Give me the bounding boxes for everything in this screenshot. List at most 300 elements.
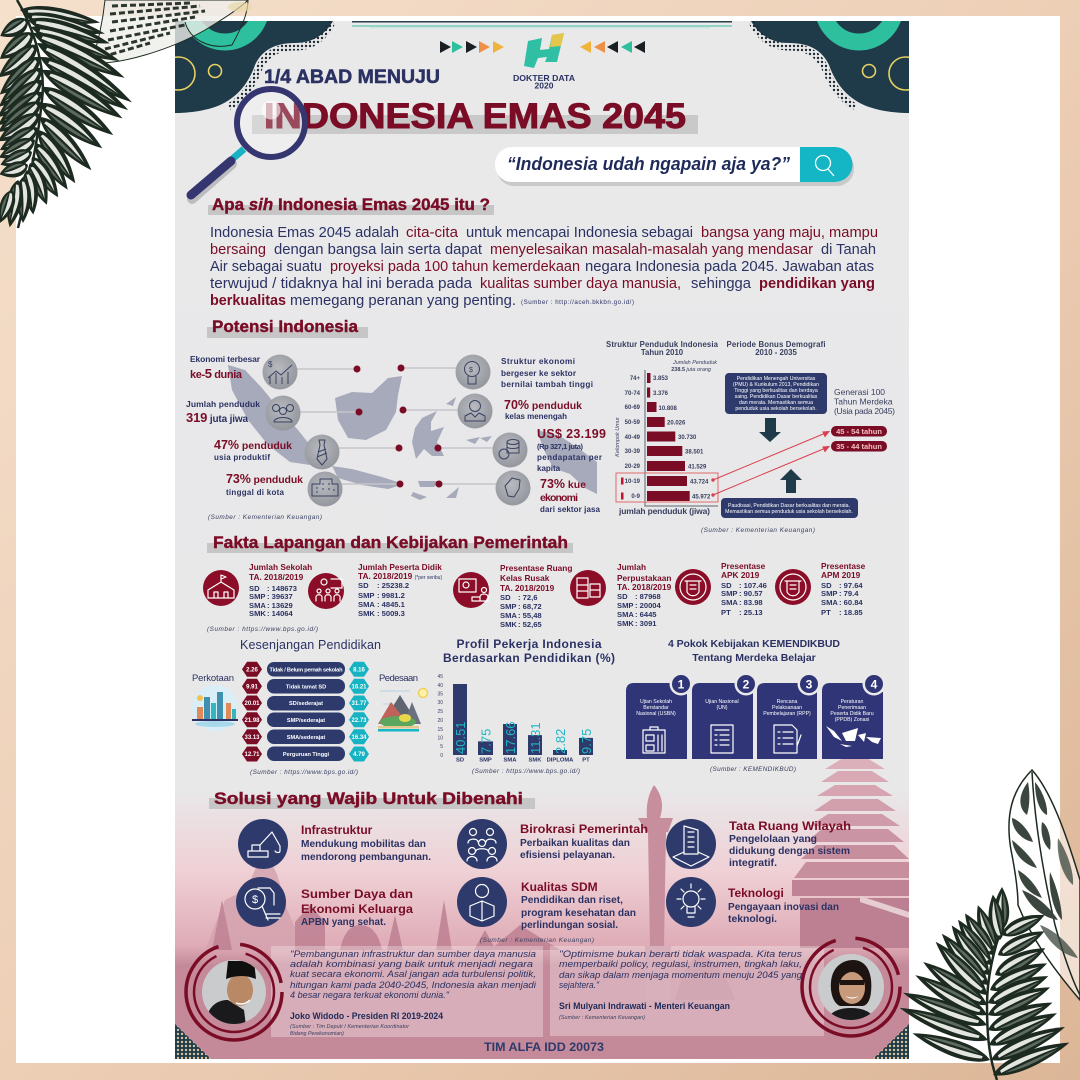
rows: left values, category pills, right values: Tidak / Belum pernah sekolah xyxy=(270,668,343,674)
logo: Dokter Data 2020 xyxy=(513,33,575,90)
callout: basic education box: Paudisasi, Pendidikan Dasar berkualitas dan merata. xyxy=(728,503,850,509)
labels: Perkotaan xyxy=(192,673,234,684)
fact: students: SMK xyxy=(358,609,375,618)
solution: sumber daya: APBN yang sehat. xyxy=(301,917,386,928)
icon: coins xyxy=(492,432,528,468)
fact: APK: APK 2019 xyxy=(721,570,760,580)
age labels and values: 10.808 xyxy=(658,406,678,412)
solution: kualitas SDM: Kualitas SDM xyxy=(521,880,598,894)
age labels and values: 3.853 xyxy=(653,376,669,382)
solution: birokrasi: Birokrasi Pemerintah xyxy=(520,822,648,836)
policy card 1: Berstandar xyxy=(643,705,669,711)
icon: city xyxy=(192,685,238,731)
rows: left values, category pills, right values xyxy=(242,662,369,762)
rows: left values, category pills, right values: 12.71 xyxy=(244,752,260,758)
x labels: SMK xyxy=(529,758,542,764)
solution: tata ruang: didukung dengan sistem xyxy=(729,846,850,857)
callout: upper education box xyxy=(725,373,827,414)
landmark: temple silhouettes xyxy=(206,867,714,964)
fact: libraries: Jumlah xyxy=(617,562,646,572)
callout: basic education box xyxy=(721,498,858,518)
fact: damaged classrooms: : 68,72 xyxy=(518,602,542,611)
bars xyxy=(647,373,690,501)
rows: left values, category pills, right values: 9.91 xyxy=(246,684,258,690)
rows: left values, category pills, right values: SMA/sederajat xyxy=(287,735,325,741)
rotated value labels: 2.82 xyxy=(553,729,568,754)
chart axes xyxy=(645,370,718,506)
icon: money bulb: $ xyxy=(469,367,473,374)
y axis: 10 xyxy=(437,736,443,742)
fact: damaged classrooms: SMK xyxy=(500,620,517,629)
callout: upper education box: penduduk usia sekolah bersekolah. xyxy=(735,406,817,412)
fact: schools: SMK xyxy=(249,609,266,618)
map of Indonesia xyxy=(228,365,597,500)
fact: APK: : 107.46 xyxy=(739,581,767,590)
fact: APM: APM 2019 xyxy=(821,570,861,580)
fact: libraries: : 20004 xyxy=(635,601,662,610)
quote text: "Pembangunan infrastruktur dan sumber daya manusia xyxy=(290,949,536,959)
title highlight bar xyxy=(252,115,698,134)
rows: left values, category pills, right values: Perguruan Tinggi xyxy=(283,752,330,758)
solution: birokrasi xyxy=(457,819,648,869)
poster sheet xyxy=(162,0,922,1059)
source note: (Sumber : https://www.bps.go.id/) xyxy=(250,769,358,776)
fact: damaged classrooms: TA. 2018/2019 xyxy=(500,583,555,593)
quote text: sejahtera." xyxy=(559,980,600,990)
age labels and values: 41.529 xyxy=(688,464,707,470)
fact: APK: SMA xyxy=(721,598,738,607)
source note: (Sumber : Kementerian Keuangan) xyxy=(559,1015,645,1021)
age labels and values: 38.501 xyxy=(685,450,704,456)
callout: upper education box: Tinggi yang berkualitas dan berdaya xyxy=(734,388,818,394)
source note: (Sumber : Tim Deputi I Kementerian Koordinator xyxy=(290,1024,409,1030)
map labels right: 73% kue xyxy=(540,477,586,491)
fact: libraries: : 6445 xyxy=(635,610,657,619)
source note: (Sumber : https://www.bps.go.id/) xyxy=(207,626,318,633)
fact: APM: : 79.4 xyxy=(839,589,859,598)
rows: left values, category pills, right values: 4.79 xyxy=(353,752,365,758)
age labels and values: 60-69 xyxy=(625,405,641,411)
panel: population structure chart: jumlah penduduk (jiwa) xyxy=(618,506,710,516)
map labels left xyxy=(186,354,303,497)
policy card 4 xyxy=(822,672,886,759)
panel: four policies xyxy=(626,638,886,773)
age labels and values: 43.724 xyxy=(690,480,709,486)
x labels: PT xyxy=(582,758,590,764)
policy card 2 xyxy=(692,672,758,759)
age labels and values: 20.026 xyxy=(667,420,686,426)
fact: students: SMP xyxy=(358,591,374,600)
solution: kualitas SDM: program kesehatan dan xyxy=(521,908,636,919)
fact: libraries: SMK xyxy=(617,619,634,628)
icon: people group xyxy=(266,396,300,430)
map labels right: pendapatan per xyxy=(537,453,602,462)
policy card 1: 1 xyxy=(678,678,685,692)
rows: left values, category pills, right values: SMP/sederajat xyxy=(287,718,325,724)
quote text: memperbaiki policy, regulasi, instrumen, tingkah laku, xyxy=(559,959,802,969)
fact: damaged classrooms: : 52,65 xyxy=(518,620,542,629)
y axis: 45 xyxy=(437,674,443,680)
age labels and values xyxy=(625,376,711,500)
speaker name: Sri Mulyani Indrawati - Menteri Keuangan xyxy=(559,1001,730,1012)
age labels and values: 0-9 xyxy=(631,494,641,500)
fact: libraries: Perpustakaan xyxy=(617,573,671,583)
map labels right: bernilai tambah tinggi xyxy=(501,380,593,389)
rows: left values, category pills, right values: 33.13 xyxy=(244,735,260,741)
logo: Dokter Data 2020: DOKTER DATA xyxy=(513,73,575,83)
quote text: 4 besar negara terkuat ekonomi dunia." xyxy=(290,990,450,1000)
age labels and values: 74+ xyxy=(630,376,640,382)
text block: definition paragraph: terwujud / tidaknya hal ini berada pada xyxy=(210,276,472,292)
text block: definition paragraph: proyeksi pada 100 tahun kemerdekaan xyxy=(330,259,580,275)
fact: schools xyxy=(203,562,312,618)
fact: libraries xyxy=(570,562,672,628)
text block: definition paragraph: menyelesaikan masalah-masalah yang mendasar xyxy=(490,242,813,258)
map labels left: 73% penduduk xyxy=(226,472,303,486)
age labels and values: 10-19 xyxy=(625,479,641,485)
heading bar xyxy=(207,327,368,338)
rows: left values, category pills, right values: 21.98 xyxy=(244,718,260,724)
panel: quote Joko Widodo xyxy=(271,946,543,1037)
fact: damaged classrooms xyxy=(453,563,572,629)
policy card 2: (UN) xyxy=(717,705,728,711)
quote text xyxy=(290,949,537,1000)
map labels right: bergeser ke sektor xyxy=(501,369,577,378)
fact: APK: SD xyxy=(721,581,732,590)
solution: sumber daya: Sumber Daya dan xyxy=(301,887,413,901)
icon: money bulb xyxy=(456,354,490,390)
fact: damaged classrooms: SD xyxy=(500,593,511,602)
portrait: Sri Mulyani xyxy=(802,938,900,1036)
fact: APM: SD xyxy=(821,581,832,590)
map labels right: 70% penduduk xyxy=(504,398,582,412)
fact: APM: SMA xyxy=(821,598,838,607)
age labels and values: 50-59 xyxy=(625,420,641,426)
heading: 4 Pokok Kebijakan KEMENDIKBUD xyxy=(668,638,840,650)
title: 1/4 abad menuju: 1/4 ABAD MENUJU xyxy=(264,67,440,88)
x labels: SD xyxy=(456,758,464,764)
text block: definition paragraph: kualitas sumber daya manusia, xyxy=(480,276,681,292)
policy card 2: 2 xyxy=(743,678,750,692)
policy card 1: Ujian Sekolah xyxy=(640,699,672,705)
fact: damaged classrooms: : 72,6 xyxy=(518,593,537,602)
quote text: adalah kombinasi yang baik untuk menjadi negara xyxy=(290,959,533,969)
rows: left values, category pills, right values: 8.16 xyxy=(353,668,365,674)
callout: upper education box: Pendidikan Menengah Universitas xyxy=(737,376,816,382)
bottom corner halftone triangles xyxy=(175,1024,909,1059)
corner: top-right wave with teal ring and yellow circles xyxy=(750,21,909,113)
highlight box xyxy=(616,473,718,502)
heading: Fakta Lapangan: Fakta Lapangan dan Kebijakan Pemerintah xyxy=(213,533,568,552)
fact: libraries: : 3091 xyxy=(635,619,657,628)
solution: teknologi: Pengayaan inovasi dan xyxy=(728,902,839,913)
text block: definition paragraph: negara Indonesia pada 2045. Jawaban atas xyxy=(585,259,874,275)
fact: schools: SD xyxy=(249,584,260,593)
arrow: down xyxy=(759,418,781,442)
fact: APK: SMP xyxy=(721,589,737,598)
fact: students: : 5009.3 xyxy=(377,609,405,618)
arrows to generation pills xyxy=(712,432,829,496)
text block: definition paragraph xyxy=(210,225,878,309)
map labels left: Ekonomi terbesar xyxy=(190,354,261,364)
quote text xyxy=(559,949,803,990)
fact: students: SD xyxy=(358,581,369,590)
text block: definition paragraph: di Tanah xyxy=(821,242,876,258)
rows: left values, category pills, right values: 22.73 xyxy=(351,718,367,724)
logo: Dokter Data 2020: 2020 xyxy=(535,80,554,90)
solution: infrastruktur: Infrastruktur xyxy=(301,823,373,837)
policy card 4: Peraturan xyxy=(841,699,863,705)
age labels and values: 70-74 xyxy=(625,391,641,397)
quote text: dan sikap dalam menjaga momentum menuju 2045 yang xyxy=(559,970,802,980)
map labels left: 47% penduduk xyxy=(214,438,292,452)
fact: APM xyxy=(775,561,866,617)
arrows: left chevrons xyxy=(440,41,504,53)
fact: schools: : 148673 xyxy=(267,584,297,593)
fact: students: Jumlah Peserta Didik xyxy=(358,562,442,572)
solution: sumber daya: Ekonomi Keluarga xyxy=(301,902,413,916)
search bar xyxy=(495,147,854,186)
heading: Potensi Indonesia: Potensi Indonesia xyxy=(212,317,359,336)
policy card 4: Penerimaan xyxy=(838,705,866,711)
fact: damaged classrooms: SMA xyxy=(500,611,517,620)
generation label: Tahun Merdeka xyxy=(834,396,893,406)
solution: teknologi: Teknologi xyxy=(728,886,784,900)
callout: upper education box: dan merata. Memastikan semua xyxy=(739,400,813,406)
icon: magnifying glass xyxy=(191,89,305,199)
fact: APK: : 83.98 xyxy=(739,598,763,607)
policy card 4: (PPDB) Zonasi xyxy=(835,717,869,723)
fact: schools: : 39637 xyxy=(267,592,293,601)
rows: left values, category pills, right values: 16.34 xyxy=(351,735,367,741)
y axis: 35 xyxy=(437,692,443,698)
bars xyxy=(453,684,593,755)
y axis: 0 xyxy=(440,753,443,759)
landmark: Bali pagoda silhouette xyxy=(792,758,909,948)
y axis: 5 xyxy=(440,744,443,750)
text block: definition paragraph: Indonesia Emas 2045 adalah xyxy=(210,225,399,241)
solution: sumber daya xyxy=(236,877,413,928)
map labels right: US$ 23.199 xyxy=(537,427,606,441)
solution: tata ruang: Pengelolaan yang xyxy=(729,834,817,845)
rows: left values, category pills, right values: Tidak tamat SD xyxy=(286,684,326,690)
text block: definition paragraph: berkualitas xyxy=(210,293,286,309)
icon: economy chart: $ xyxy=(268,360,273,369)
fact: libraries: : 87968 xyxy=(635,592,661,601)
solution: tata ruang: Tata Ruang Wilayah xyxy=(729,819,851,833)
heading: Kesenjangan Pendidikan xyxy=(240,638,381,652)
policy card 1: Nasional (USBN) xyxy=(636,711,676,717)
policy card 3: Rencana xyxy=(777,699,797,705)
footer team credit: TIM ALFA IDD 20073 xyxy=(484,1042,604,1054)
map labels left: 319 juta jiwa xyxy=(186,410,248,425)
text block: definition paragraph: bangsa yang maju, mampu xyxy=(701,225,878,241)
decoration: bottom-right palm frond xyxy=(897,887,1072,1080)
icon: economy chart xyxy=(262,354,298,390)
age labels and values: 40-49 xyxy=(625,435,641,441)
fact: APM: Presentase xyxy=(821,561,866,571)
policy card 1 xyxy=(626,672,692,759)
generation label: (Usia pada 2045) xyxy=(834,406,895,416)
fact: APM: PT xyxy=(821,608,831,617)
source note: (Sumber : KEMENDIKBUD) xyxy=(710,766,796,773)
rows: left values, category pills, right values: 20.01 xyxy=(244,701,260,707)
generation label xyxy=(834,387,895,416)
source note: (Sumber : Kementerian Keuangan) xyxy=(480,937,594,944)
heading bar xyxy=(209,798,535,809)
callout: basic education box: Memastikan semua penduduk usia sekolah bersekolah. xyxy=(725,509,853,515)
solution: sumber daya: $ xyxy=(252,894,258,906)
heading xyxy=(668,638,840,664)
population total note xyxy=(671,360,717,373)
age labels and values: 30-39 xyxy=(625,449,641,455)
panel: worker profile bar chart xyxy=(437,637,615,775)
text block: definition paragraph: Air sebagai suatu xyxy=(210,259,322,275)
solution: kualitas SDM xyxy=(457,877,636,931)
search text: “Indonesia udah ngapain aja ya?” xyxy=(507,154,790,174)
solution: tata ruang: integratif. xyxy=(729,858,777,869)
quote text: hitungan kami pada 2040-2045, Indonesia akan menjadi xyxy=(290,980,537,990)
quote text: "Optimisme bukan berarti tidak waspada. Kita terus xyxy=(559,949,803,959)
solution: kualitas SDM: perlindungan sosial. xyxy=(521,920,618,931)
age labels and values: 3.376 xyxy=(653,391,669,397)
portrait: Joko Widodo xyxy=(186,944,282,1040)
fact: APM: : 60.84 xyxy=(839,598,863,607)
panel: solutions xyxy=(236,819,851,944)
title: Indonesia Emas 2045: INDONESIA EMAS 2045 xyxy=(264,97,686,136)
fact: damaged classrooms: Kelas Rusak xyxy=(500,573,550,583)
pill: 35-44: 35 - 44 tahun xyxy=(836,442,882,451)
fact: libraries: TA. 2018/2019 xyxy=(617,582,672,592)
fact: damaged classrooms: : 55,48 xyxy=(518,611,542,620)
decoration: top engraved leaf xyxy=(92,0,252,63)
callout: upper education box: (PMU) & Kurikulum 2013, Pendidikan xyxy=(733,382,819,388)
source note: (Sumber : Kementerian Keuangan) xyxy=(701,527,815,534)
icon: middle class person xyxy=(458,394,492,428)
fact: students: : 25238.2 xyxy=(377,581,409,590)
policy card 3: 3 xyxy=(806,678,813,692)
landmark: Monas monument silhouette xyxy=(638,785,673,956)
policy card 4: Peserta Didik Baru xyxy=(830,711,874,717)
chart titles: 2010 - 2035 xyxy=(755,348,797,357)
heading: what is Indonesia Emas: Apa sih Indonesia Emas 2045 itu ? xyxy=(212,195,490,214)
fact: schools: SMP xyxy=(249,592,265,601)
fact: students: SMA xyxy=(358,600,375,609)
fact: schools: TA. 2018/2019 xyxy=(249,572,304,582)
panel: education gap: Pedesaan xyxy=(379,673,418,684)
rotated value labels xyxy=(453,721,594,754)
map labels left: Jumlah penduduk xyxy=(186,399,260,409)
map labels left: usia produktif xyxy=(214,453,270,462)
x labels: SMA xyxy=(504,758,517,764)
top centre strip xyxy=(352,21,732,28)
fact: students: : 9981.2 xyxy=(377,591,405,600)
solution: teknologi xyxy=(666,877,839,927)
map labels right: ekonomi xyxy=(540,492,578,504)
fact: schools: : 14064 xyxy=(267,609,294,618)
decoration: top-left palm frond xyxy=(0,0,137,229)
solution: teknologi: teknologi. xyxy=(728,914,777,925)
panel: Indonesia potential map xyxy=(186,354,606,521)
panel: quote Sri Mulyani xyxy=(550,946,824,1036)
y axis xyxy=(437,674,443,759)
policy card 3: Pembelajaran (RPP) xyxy=(763,711,811,717)
solution: infrastruktur: mendorong pembangunan. xyxy=(301,852,431,863)
quote text: kuat secara ekonomi. Asal jangan ada turbulensi politik, xyxy=(290,969,536,979)
callout: upper education box: saing. Pendidikan Dasar berkualitas xyxy=(735,394,818,400)
map labels left: tinggal di kota xyxy=(226,488,285,497)
chart titles: Tahun 2010 xyxy=(641,348,684,357)
age labels and values: 20-29 xyxy=(625,464,641,470)
source note: (Sumber : https://www.bps.go.id/) xyxy=(472,768,580,775)
decoration: bottom-right large leaf xyxy=(1009,770,1080,1000)
x labels xyxy=(456,758,590,764)
chart titles: Periode Bonus Demografi xyxy=(726,340,826,349)
policy card 3: Pelaksanaan xyxy=(772,705,802,711)
y axis: 20 xyxy=(437,718,443,724)
fact: APM: SMP xyxy=(821,589,837,598)
chart title: Profil Pekerja Indonesia xyxy=(456,637,602,651)
map labels right: Struktur ekonomi xyxy=(501,357,575,366)
solution: birokrasi: Perbaikan kualitas dan xyxy=(520,838,630,849)
fact: students xyxy=(308,562,442,618)
arrows: right chevrons xyxy=(580,41,645,53)
fact: libraries: SMA xyxy=(617,610,634,619)
fact: students: TA. 2018/2019 (*per seribu) xyxy=(358,571,442,581)
map labels right: (Rp 327,1 juta) xyxy=(537,442,584,451)
chart title: Berdasarkan Pendidikan (%) xyxy=(443,651,615,665)
fact: schools: SMA xyxy=(249,601,266,610)
population total note: 238.5 juta orang xyxy=(671,367,712,373)
x labels: SMP xyxy=(479,758,492,764)
source note: (Sumber : Kementerian Keuangan) xyxy=(208,514,322,521)
fact: damaged classrooms: Presentase Ruang xyxy=(500,563,572,573)
text block: definition paragraph: untuk mencapai Indonesia sebagai xyxy=(466,225,693,241)
text block: definition paragraph: (Sumber : http://aceh.bkkbn.go.id/) xyxy=(521,299,634,306)
policy card 4: 4 xyxy=(871,678,878,692)
fact: students: : 4845.1 xyxy=(377,600,406,609)
icon: hands xyxy=(496,470,530,506)
solution: infrastruktur xyxy=(238,819,431,869)
y axis: 15 xyxy=(437,727,443,733)
fact: APK: : 90.57 xyxy=(739,589,763,598)
icon: necktie xyxy=(304,434,340,470)
policy card 3 xyxy=(757,672,820,759)
rows: left values, category pills, right values: 16.21 xyxy=(351,684,367,690)
age labels and values: 30.730 xyxy=(678,435,697,441)
heading: Solusi: Solusi yang Wajib Untuk Dibenahi xyxy=(214,789,523,808)
rows: left values, category pills, right values: SD/sederajat xyxy=(289,701,323,707)
text block: definition paragraph: cita-cita xyxy=(406,225,458,241)
rotated value labels: 11.31 xyxy=(528,722,543,754)
panel: population structure chart xyxy=(606,340,895,534)
policy card 2: Ujian Nasional xyxy=(705,699,739,705)
fact: schools: Jumlah Sekolah xyxy=(249,562,312,572)
rotated value labels: 7.75 xyxy=(478,729,494,754)
text block: definition paragraph: pendidikan yang xyxy=(759,276,875,292)
icon: city building xyxy=(308,472,342,506)
map labels right: kapita xyxy=(537,464,561,473)
age labels and values: 45.972 xyxy=(692,494,711,500)
text block: definition paragraph: sehingga xyxy=(691,276,751,292)
fact: libraries: SD xyxy=(617,592,628,601)
fact: APK: : 25.13 xyxy=(739,608,763,617)
map labels left: ke-5 dunia xyxy=(190,366,243,381)
fact: libraries: SMP xyxy=(617,601,633,610)
x labels: DIPLOMA xyxy=(547,758,574,764)
source note xyxy=(290,1024,409,1037)
map labels right: kelas menengah xyxy=(505,412,567,421)
